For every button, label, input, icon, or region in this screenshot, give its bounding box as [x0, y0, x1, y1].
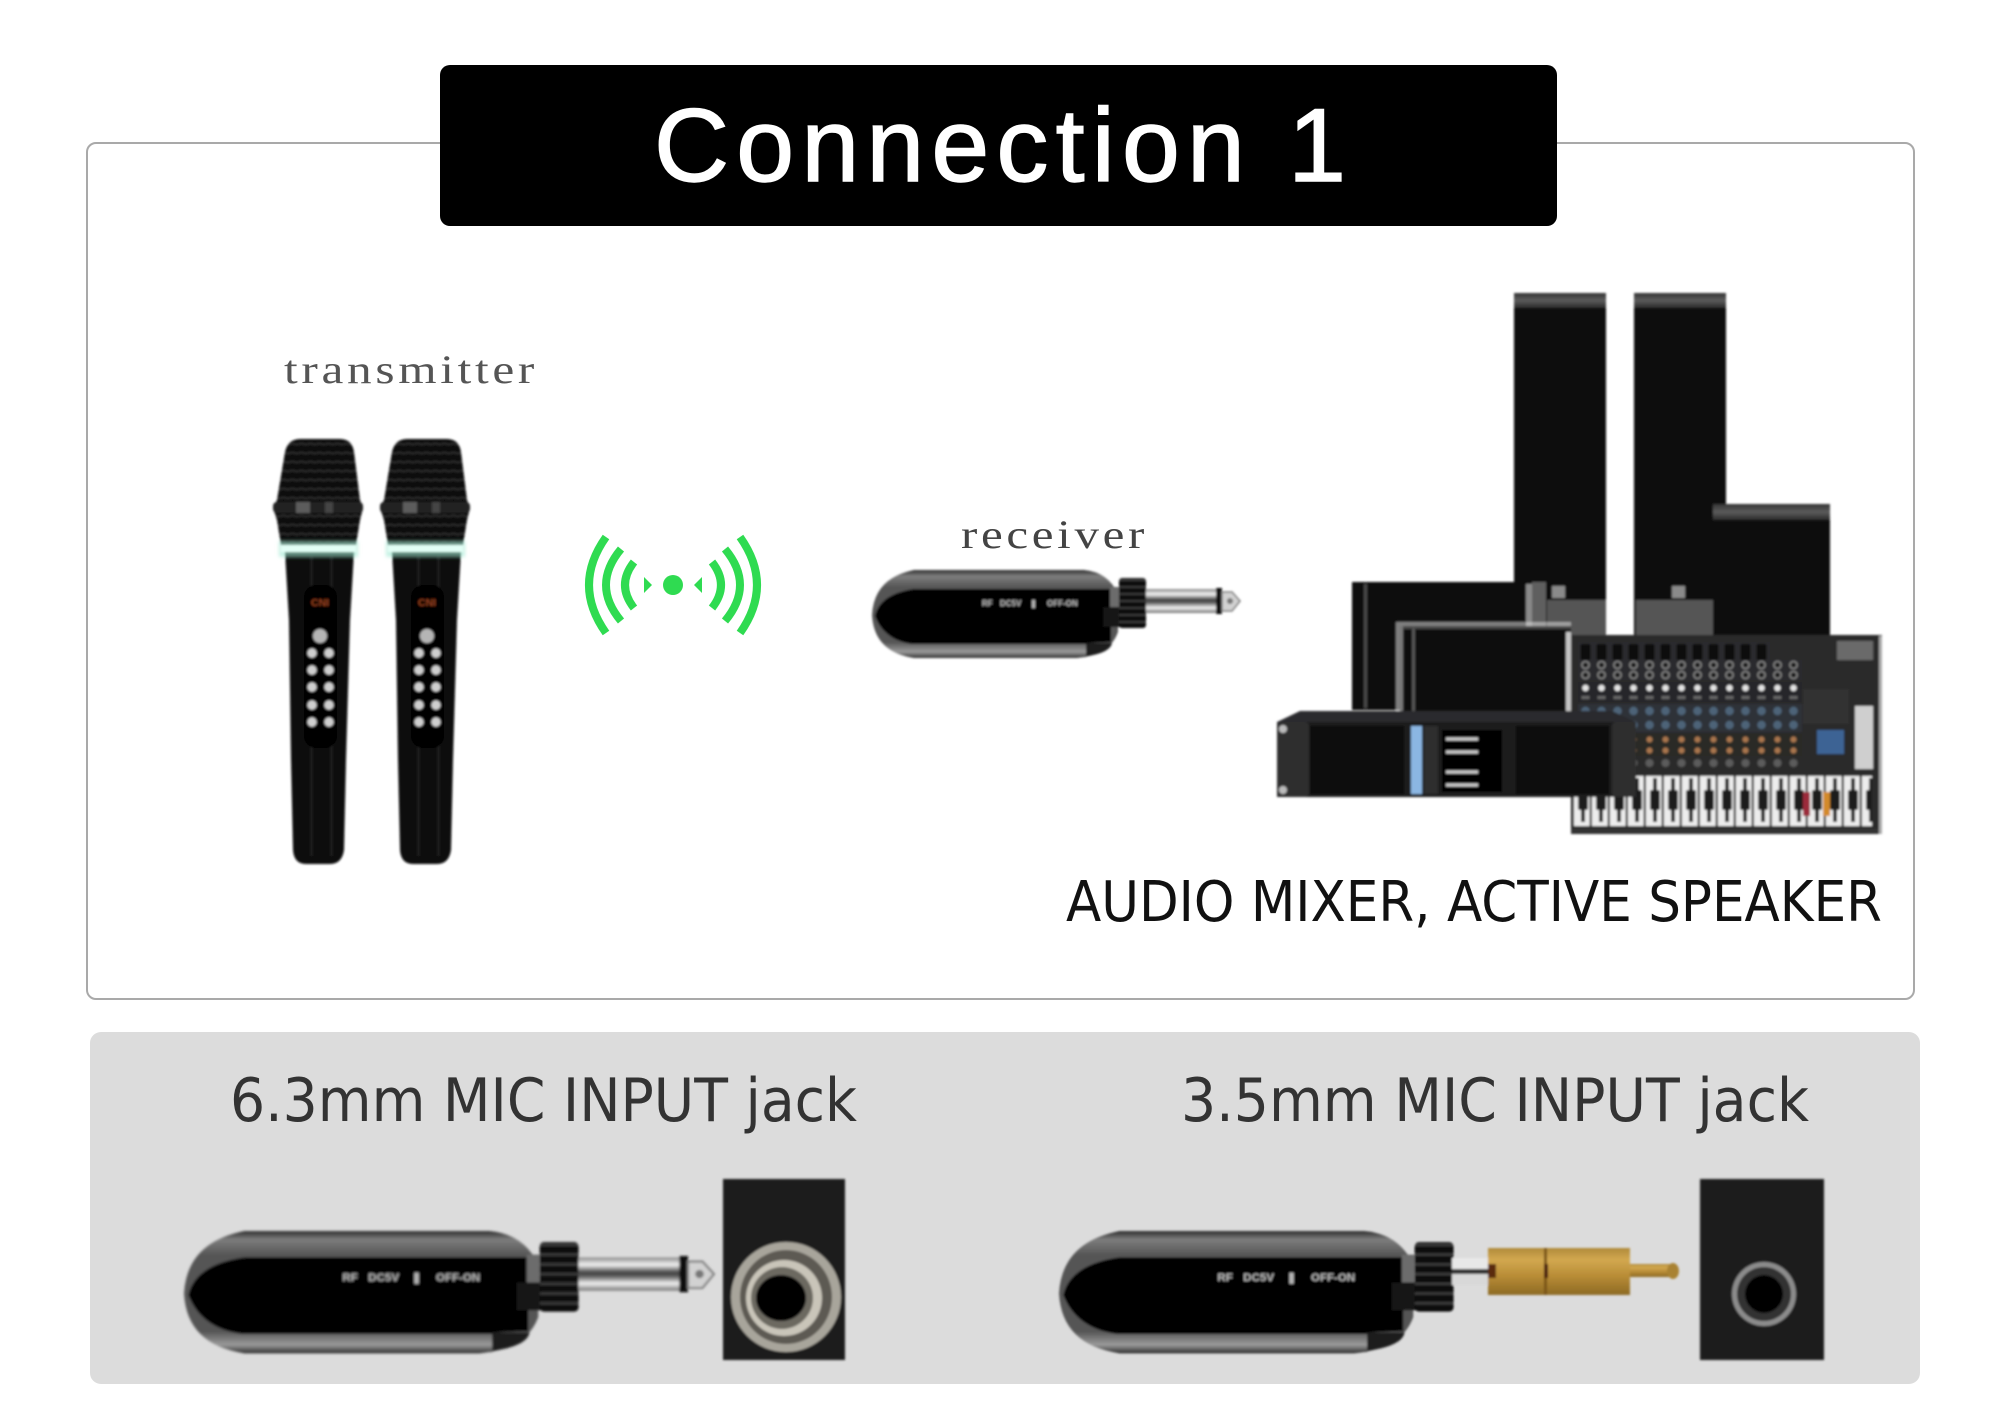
icon: two wireless microphones [273, 439, 470, 864]
panel: input jack options [90, 1032, 1920, 1384]
audio mixer [1571, 635, 1882, 834]
tall speaker left [1514, 293, 1606, 638]
monitor speaker back [1352, 582, 1546, 710]
panel: connection diagram frame [87, 143, 1914, 999]
icon: receiver with 6.3mm plug, detail [184, 1231, 714, 1353]
label: receiver: receiver [961, 512, 1148, 557]
icon: 3.5mm socket [1700, 1179, 1824, 1360]
tall speaker right [1634, 293, 1726, 638]
icon: wireless signal [589, 537, 757, 633]
illustration: audio equipment stack [1277, 293, 1882, 834]
label: 6.3mm mic input jack: 6.3mm MIC INPUT jack [230, 1066, 857, 1136]
label: 3.5mm mic input jack: 3.5mm MIC INPUT jack [1181, 1066, 1809, 1136]
title: Connection 1 [654, 88, 1346, 204]
label: transmitter: transmitter [284, 347, 538, 392]
icon: 6.3mm socket [723, 1179, 845, 1360]
icon: receiver with 6.3mm plug [872, 570, 1240, 658]
monitor speaker front [1396, 622, 1571, 716]
icon: receiver with 3.5mm gold adapter [1059, 1231, 1679, 1353]
power amplifier [1277, 711, 1636, 797]
title [440, 65, 1557, 226]
label: audio mixer, active speaker: AUDIO MIXER, ACTIVE SPEAKER [1066, 870, 1882, 935]
small speaker [1713, 504, 1830, 640]
